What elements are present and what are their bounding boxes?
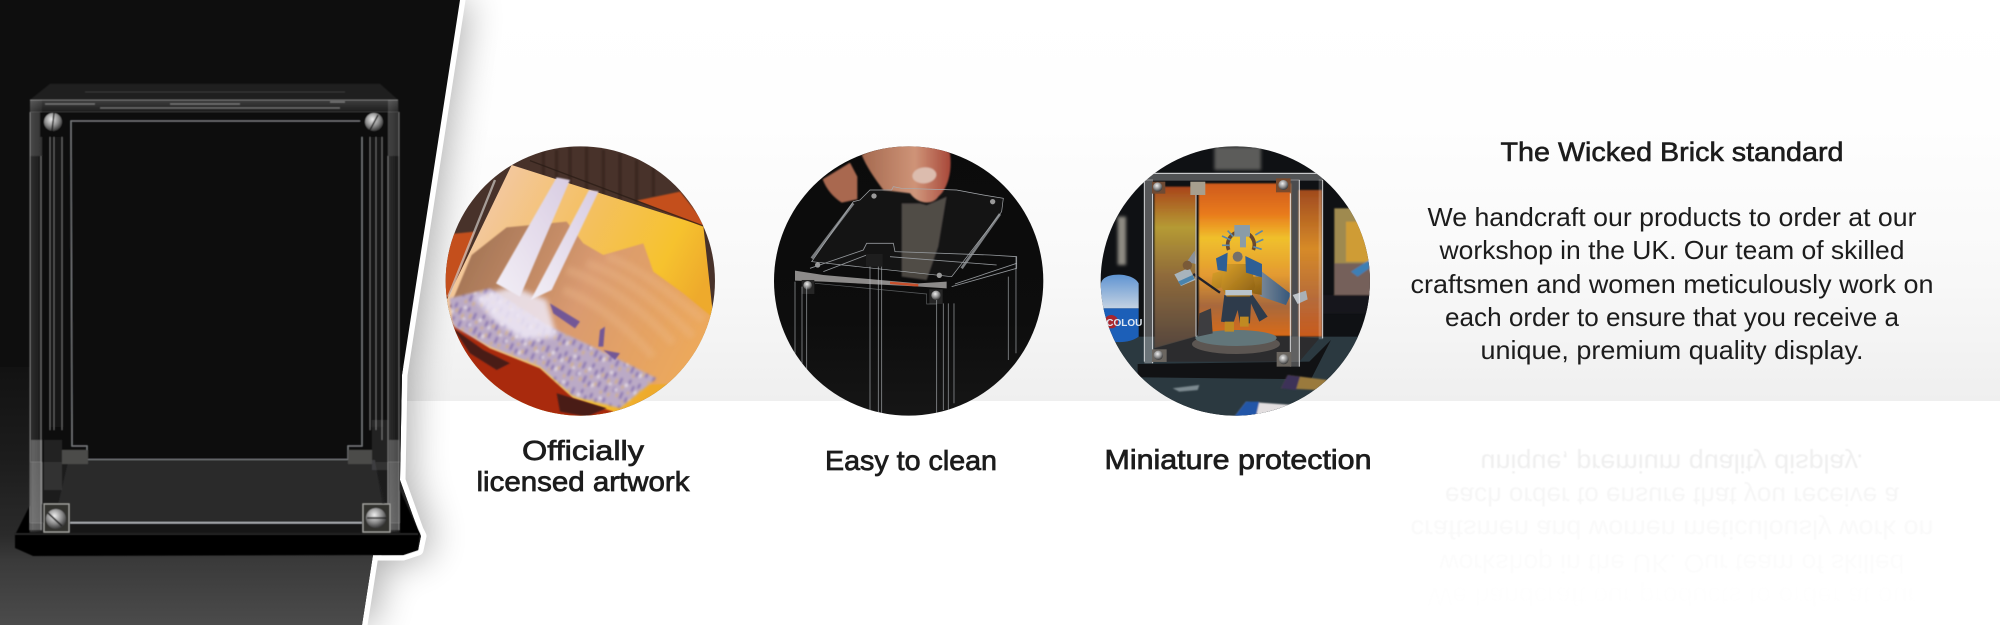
case: top-left screw (40, 112, 68, 137)
case: bottom-right screw (363, 504, 390, 532)
miniature: torso (1221, 264, 1255, 297)
photo 2: lid thick edge (812, 203, 1000, 268)
miniature: gold arms (1211, 270, 1262, 295)
panel: dark product photo with white edge (0, 0, 480, 625)
circle photo: officially licensed artwork (446, 146, 715, 416)
case: bottom-left screw (44, 504, 69, 532)
photo 3: table top (1112, 336, 1358, 416)
miniature: gold boots (1225, 317, 1249, 332)
miniature: rock (1198, 308, 1213, 337)
case: side floor translucent sections (42, 462, 388, 522)
miniature: head (1233, 252, 1243, 262)
photo 2: front rim band (795, 271, 947, 288)
photo 1: speckled violet band (449, 288, 657, 408)
miniature: hammer shaft (1193, 274, 1220, 293)
photo 3: corner bolts (1152, 178, 1291, 367)
miniature: shoulders (1216, 253, 1262, 277)
miniature: cape (1253, 268, 1291, 305)
photo 3: paint pot: COLOU (1106, 318, 1142, 329)
label: easy to clean: Easy to clean (825, 445, 997, 476)
miniature: hammer spike (1187, 251, 1196, 264)
circle photo: easy to clean (770, 140, 1050, 420)
photo 2: index finger (823, 163, 857, 203)
body text block: each order to ensure that you receive a (1445, 302, 1900, 332)
photo 1: red ground (452, 323, 614, 416)
photo 3: right side panel (1299, 190, 1322, 337)
photo 2: orange glint (890, 282, 918, 287)
photo 1: panel edges (448, 180, 495, 297)
case: top plate (30, 84, 398, 100)
label: miniature protection: Miniature protection (1104, 444, 1372, 475)
case: black base plate (15, 490, 420, 556)
photo 3: acrylic frame (1144, 173, 1323, 367)
case: top front rail (30, 100, 398, 112)
photo 1: dark ground patches (453, 328, 607, 417)
photo 3: miniature base (1192, 330, 1280, 354)
miniature: legs (1221, 295, 1268, 323)
mirrored reflection of body text: craftsmen and women meticulously work on (1410, 514, 1934, 544)
photo 1: mountain ridges (563, 257, 703, 357)
photo 1: top panel edge (530, 161, 703, 226)
photo 2: raised lid (812, 187, 1003, 277)
photo 3: case floor (1154, 337, 1319, 362)
photo 1: orange art behind (440, 192, 707, 300)
mirrored reflection of body text: workshop in the UK. Our team of skilled (1438, 548, 1904, 578)
photo 1: tilted artwork panel (447, 165, 712, 416)
photo 1: white burst (473, 287, 557, 340)
photo 3: paint pot (1101, 275, 1142, 342)
body text block (1410, 202, 1934, 365)
photo 1: left light beam (496, 177, 570, 297)
case: front floor strip (15, 522, 418, 535)
case: back corner brackets (62, 450, 372, 464)
photo 2: panel lines (815, 283, 937, 304)
photo 3: blurred shapes behind (1118, 147, 1261, 265)
body text block: unique, premium quality display. (1480, 335, 1864, 365)
miniature: halo crest (1234, 225, 1250, 247)
miniature: silver belt (1225, 290, 1252, 295)
body text block: We handcraft our products to order at our (1428, 202, 1917, 232)
case: felt floor (54, 460, 385, 522)
photo 2: corner bolts (802, 254, 943, 304)
mirrored reflection of body text (1410, 448, 1934, 612)
case: top plate inner line (85, 91, 345, 93)
label: officially licensed artwork (476, 435, 691, 497)
body text block: workshop in the UK. Our team of skilled (1438, 235, 1904, 265)
circle photo: miniature protection (1096, 140, 1376, 420)
case: top-right screw (360, 112, 387, 137)
photo 2: thumb and fingers (862, 145, 951, 203)
case: left pillars (30, 100, 63, 532)
mirrored reflection of body text: We handcraft our products to order at our (1428, 582, 1917, 612)
miniature: hammer knob (1183, 261, 1192, 270)
photo 2: finger reflection in lid (902, 197, 947, 280)
miniature: hammer blue strap (1178, 275, 1194, 285)
photo 2: lid screws (815, 193, 995, 278)
photo 2: thumbnail (912, 166, 937, 185)
mirrored reflection of body text: unique, premium quality display. (1480, 448, 1864, 478)
photo 2: black background (770, 140, 1050, 420)
photo 1: right light beam (531, 190, 599, 300)
miniature: hammer head (1174, 268, 1195, 286)
divider shadow (300, 0, 470, 625)
photo 3: dark studio background (1096, 140, 1376, 420)
label: officially licensed artwork: licensed artwork (476, 466, 691, 497)
photo 3: rear backdrop panel (1199, 183, 1291, 336)
photo 1: wood grain (543, 147, 653, 203)
miniature: halo spikes (1222, 231, 1263, 249)
body text block: craftsmen and women meticulously work on (1410, 269, 1934, 299)
miniature: cape tip (1293, 291, 1308, 304)
photo 3: left side panel (1154, 187, 1196, 348)
miniature: halo (1228, 232, 1254, 250)
case: right pillars (370, 100, 399, 532)
photo 2: vertical acrylic posts (795, 257, 1016, 413)
case: inner dark back area (30, 112, 400, 462)
background: lower white band (0, 401, 2000, 625)
mirrored reflection of body text: each order to ensure that you receive a (1445, 482, 1900, 512)
photo 1: violet crystals (550, 303, 620, 360)
photo 3: second case in background (1323, 208, 1373, 313)
photo 3: base plate (1138, 340, 1331, 379)
background: upper light gradient (0, 0, 2000, 401)
label: officially licensed artwork: Officially (522, 435, 644, 466)
photo 2: case rim (810, 243, 1017, 287)
photo 1: mountains (450, 222, 712, 387)
photo 3: paint brushes on table (1173, 375, 1328, 417)
case: inner panel outline (71, 121, 362, 460)
photo 1: dark wood backdrop (440, 140, 720, 420)
photo 3: painted miniature (1174, 225, 1308, 337)
product: acrylic display case (15, 84, 420, 556)
heading: the wicked brick standard: The Wicked Brick standard (1500, 137, 1844, 167)
